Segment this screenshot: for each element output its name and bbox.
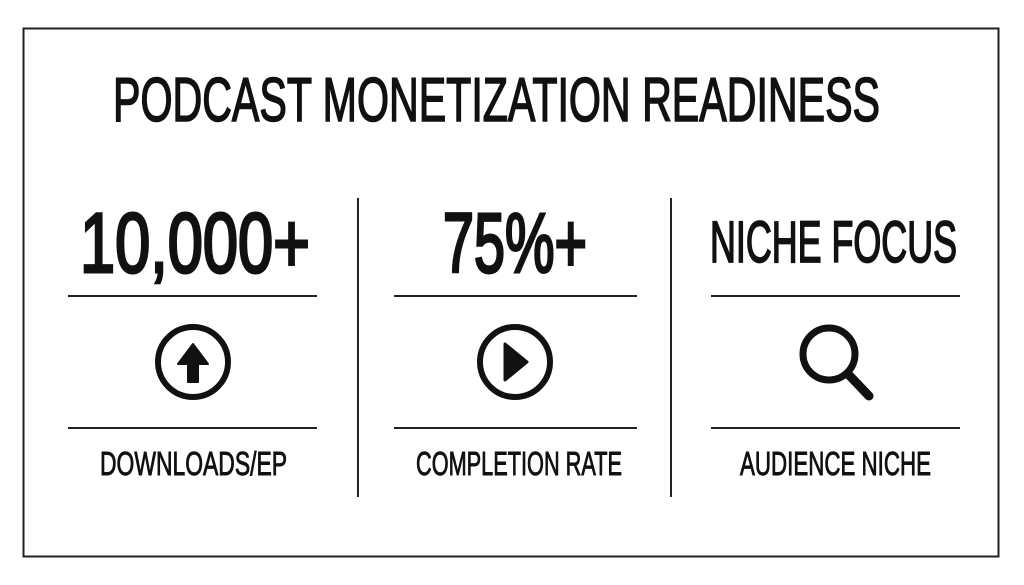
- stat: 75%+: 75%+: [443, 196, 587, 290]
- icon: up arrow: [158, 327, 228, 397]
- panel: completion: [394, 196, 637, 482]
- icon: play: [480, 327, 550, 397]
- panel: downloads: [68, 196, 317, 482]
- label: audience niche: AUDIENCE NICHE: [740, 445, 931, 482]
- icon: magnifier: [803, 328, 869, 396]
- label: completion rate: COMPLETION RATE: [416, 445, 622, 482]
- stat: 10,000+: 10,000+: [80, 196, 310, 290]
- panel: niche: [710, 210, 960, 482]
- label: downloads/ep: DOWNLOADS/EP: [100, 445, 287, 482]
